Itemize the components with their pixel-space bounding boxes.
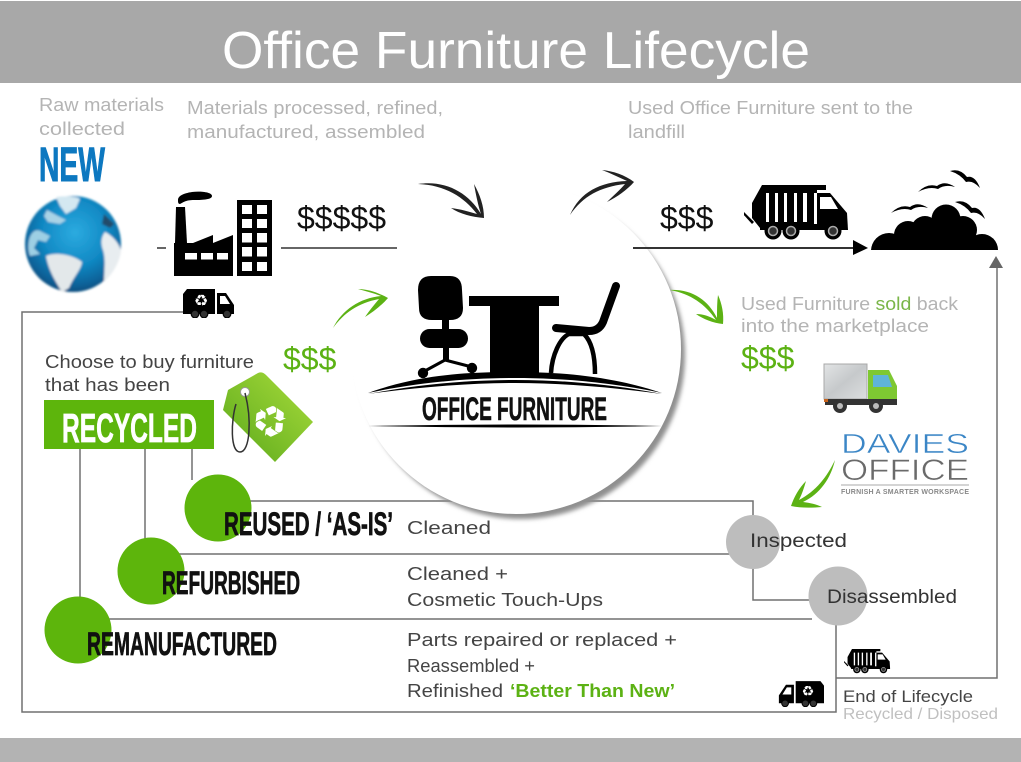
furniture logo text: OFFICE FURNITURE bbox=[422, 391, 607, 427]
arrow: green davies bbox=[791, 460, 835, 508]
icon: recycling truck top bbox=[183, 289, 234, 318]
furniture logo bbox=[368, 276, 662, 428]
choose to buy label: that has been bbox=[45, 375, 170, 395]
icon: side chair bbox=[551, 286, 616, 374]
step: disassembled: Disassembled bbox=[827, 587, 957, 608]
header band bbox=[0, 1, 1021, 83]
icon: landfill bbox=[871, 170, 998, 250]
icon: office chair bbox=[418, 276, 477, 378]
used furniture sold label: Used Furniture sold back bbox=[741, 294, 959, 314]
landfill label: Used Office Furniture sent to the bbox=[628, 98, 913, 118]
tier: remanufactured: Refinished bbox=[407, 681, 503, 701]
logo: Davies Office: FURNISH A SMARTER WORKSPACE bbox=[841, 489, 969, 496]
used furniture sold label: into the marketplace bbox=[741, 316, 929, 336]
choose to buy label: Choose to buy furniture bbox=[45, 352, 254, 372]
end of lifecycle label bbox=[843, 687, 998, 723]
footer band bbox=[0, 738, 1021, 762]
materials processed label: Materials processed, refined, bbox=[187, 98, 443, 118]
end of lifecycle label: End of Lifecycle bbox=[843, 687, 973, 706]
tier: reused bbox=[184, 474, 491, 542]
tier: remanufactured: ‘Better Than New’ bbox=[510, 681, 675, 701]
materials processed label bbox=[187, 98, 443, 142]
connector lines bbox=[22, 268, 997, 712]
price: new: $$$$$ bbox=[297, 200, 386, 236]
logo: Davies Office bbox=[841, 428, 969, 496]
icon: recycle tag bbox=[223, 372, 313, 462]
tier: reused: REUSED / ‘AS-IS’ bbox=[224, 506, 393, 542]
tier: refurbished bbox=[118, 538, 603, 610]
tier: refurbished: Cleaned + bbox=[407, 564, 508, 584]
arrow: green recycled bbox=[333, 289, 388, 328]
logo: Davies Office: DAVIES bbox=[841, 428, 969, 459]
choose to buy label bbox=[45, 352, 254, 395]
price: resale landfill: $$$ bbox=[660, 200, 714, 236]
icon: factory bbox=[174, 192, 272, 276]
materials processed label: manufactured, assembled bbox=[187, 122, 425, 142]
icon: desk bbox=[469, 296, 559, 374]
icon: garbage truck bbox=[743, 185, 848, 240]
recycled banner bbox=[44, 400, 214, 451]
tier: remanufactured bbox=[44, 596, 677, 701]
step: inspected: Inspected bbox=[750, 531, 847, 552]
tier: remanufactured: Parts repaired or replaced + bbox=[407, 630, 677, 650]
step: disassembled bbox=[808, 566, 957, 626]
used furniture sold label bbox=[741, 294, 959, 336]
step: inspected bbox=[726, 515, 847, 569]
title: Office Furniture Lifecycle bbox=[222, 22, 810, 80]
arrow: out of furniture bbox=[570, 170, 634, 215]
end of lifecycle label: Recycled / Disposed bbox=[843, 706, 998, 723]
recycled banner: RECYCLED bbox=[62, 405, 197, 451]
tier: reused: Cleaned bbox=[407, 518, 491, 538]
arrow: green sold bbox=[670, 290, 723, 324]
price: recycled: $$$ bbox=[283, 341, 337, 377]
central circle bbox=[351, 184, 685, 519]
icon: small recycling truck bbox=[779, 681, 824, 707]
icon: globe bbox=[25, 196, 121, 292]
landfill label: landfill bbox=[628, 122, 685, 142]
NEW heading: NEW bbox=[39, 139, 105, 192]
landfill arrow line bbox=[633, 240, 868, 255]
tier: remanufactured: REMANUFACTURED bbox=[87, 626, 277, 662]
landfill up arrowhead bbox=[989, 256, 1003, 268]
arrow: into furniture bbox=[418, 183, 484, 218]
tier: refurbished: Cosmetic Touch-Ups bbox=[407, 590, 603, 610]
icon: recycle tag: ♻ bbox=[240, 391, 299, 452]
raw materials label bbox=[39, 95, 164, 139]
icon: small garbage truck bbox=[844, 649, 890, 673]
process line bbox=[157, 247, 397, 249]
tier: refurbished: REFURBISHED bbox=[162, 565, 300, 601]
icon: delivery truck bbox=[824, 364, 897, 413]
raw materials label: collected bbox=[39, 119, 125, 139]
raw materials label: Raw materials bbox=[39, 95, 164, 115]
floor swoosh bbox=[368, 372, 662, 394]
underline swoosh bbox=[368, 424, 662, 428]
tier: remanufactured: Reassembled + bbox=[407, 656, 535, 676]
landfill label bbox=[628, 98, 913, 142]
logo: Davies Office: OFFICE bbox=[841, 454, 969, 487]
price: sold back: $$$ bbox=[741, 340, 795, 376]
